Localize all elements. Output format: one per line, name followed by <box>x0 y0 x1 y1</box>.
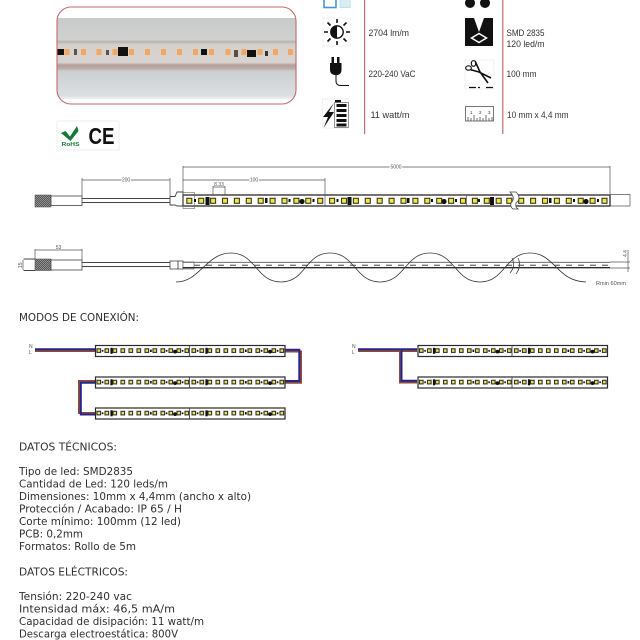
N L labels: N <box>29 344 33 350</box>
diagram: series connection <box>29 344 301 419</box>
text block: technical data: Corte mínimo: 100mm (12 led) <box>19 515 181 528</box>
N L labels: N <box>352 344 356 350</box>
icon: ruler <box>466 106 494 121</box>
icon: beam angle squares <box>324 0 350 8</box>
icon: ruler: 3 <box>488 110 491 115</box>
text block: technical data: Cantidad de Led: 120 leds/m <box>19 478 168 490</box>
voltage text: 220-240 VaC <box>368 69 416 79</box>
dimension lines <box>18 245 630 272</box>
CE mark: CE <box>88 123 114 149</box>
N L labels: L <box>29 350 32 356</box>
minimum radius label: Rmin 60mm <box>596 281 626 287</box>
divider line <box>502 0 503 134</box>
text block: technical data: Formatos: Rollo de 5m <box>19 540 136 553</box>
LEDs in the photo <box>64 49 293 55</box>
diagram: parallel connection <box>352 344 608 388</box>
wattage text: 11 watt/m <box>370 110 410 120</box>
icon: scissors <box>465 60 494 89</box>
break mark <box>510 192 519 209</box>
dimension lines: 53 <box>56 245 61 251</box>
dimension lines: 100 <box>250 178 258 184</box>
connector and cable <box>35 192 183 207</box>
icon: battery with bolt <box>322 99 348 128</box>
LED strip profile <box>183 258 610 274</box>
bend curve <box>176 253 586 282</box>
strips <box>96 346 285 419</box>
rounded frame <box>57 7 296 104</box>
text block: electrical data: Tensión: 220-240 vac <box>18 590 132 603</box>
icon: RoHS check: RoHS <box>62 142 80 148</box>
wiring <box>358 349 417 382</box>
panel: spec column 2 <box>465 0 569 134</box>
icon: ruler: 2 <box>479 110 482 115</box>
technical drawing: top view <box>35 164 630 209</box>
photo of LED strip <box>57 7 296 104</box>
dimension lines <box>82 164 630 206</box>
heading: technical data: DATOS TÉCNICOS: <box>19 440 117 454</box>
panel: spec column 1 <box>322 0 416 134</box>
heading: electrical data: DATOS ELÉCTRICOS: <box>19 566 128 578</box>
text block: technical data: Dimensiones: 10mm x 4,4mm (ancho x alto) <box>19 490 251 503</box>
dimension lines: 8.33 <box>214 182 224 188</box>
technical drawing: side view <box>18 245 630 287</box>
connector and cable <box>24 259 194 270</box>
N L labels <box>29 344 33 356</box>
N L labels: L <box>352 350 355 356</box>
dimension lines: 15 <box>18 262 24 268</box>
icon: ruler: 1 <box>470 110 473 115</box>
icon: SMD chip <box>465 18 493 46</box>
cut length text: 100 mm <box>506 69 537 79</box>
text block: technical data: Protección / Acabado: IP 65 / H <box>19 502 182 516</box>
LED type text <box>506 28 545 49</box>
divider line <box>364 0 365 134</box>
wiring <box>35 349 301 414</box>
text block: technical data: PCB: 0,2mm <box>19 528 83 540</box>
text block: technical data <box>18 465 251 553</box>
text block: technical data: Tipo de led: SMD2835 <box>18 465 133 478</box>
LED strip <box>183 192 610 209</box>
dimension lines: 5000 <box>390 164 402 170</box>
strips <box>418 346 608 388</box>
dimension lines: 200 <box>122 178 130 184</box>
heading: connection modes: MODOS DE CONEXIÓN: <box>19 311 139 324</box>
text block: electrical data: Capacidad de disipación: 11 watt/m <box>19 615 204 628</box>
icon: brightness sun <box>323 18 351 46</box>
dimension lines: 4.4 <box>623 250 629 257</box>
text block: electrical data: Intensidad máx: 46,5 mA/m <box>19 602 175 616</box>
text block: electrical data <box>18 590 204 640</box>
lumen text: 2704 lm/m <box>368 28 409 38</box>
LED type text: 120 led/m <box>506 39 545 49</box>
dimensions text: 10 mm x 4,4 mm <box>507 110 569 120</box>
icon: two dots <box>465 0 490 8</box>
LED type text: SMD 2835 <box>506 28 544 38</box>
icon: plug <box>330 57 349 86</box>
certification badges: RoHS and CE <box>57 121 119 150</box>
N L labels <box>352 344 356 356</box>
